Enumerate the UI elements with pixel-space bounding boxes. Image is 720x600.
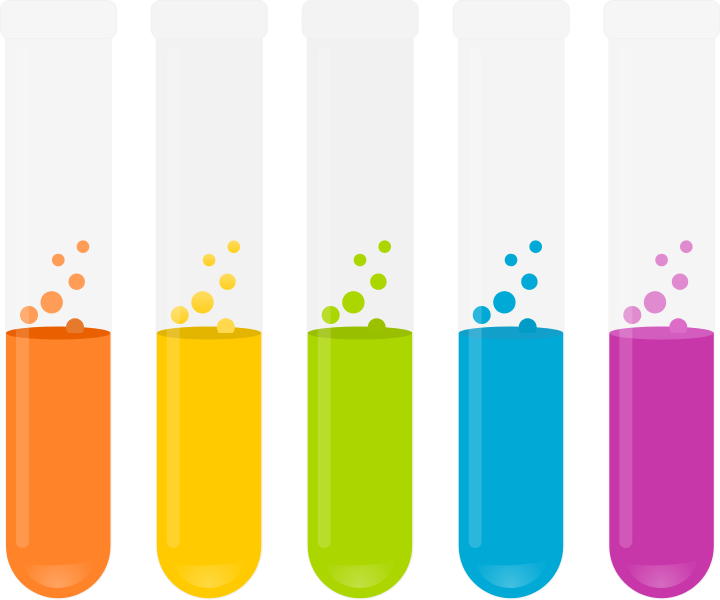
liquid [6,333,110,598]
liquid [609,333,714,598]
tube cap [302,0,418,38]
test tube: blue [453,0,569,600]
glass body [307,30,414,600]
liquid surface [6,326,110,340]
bottom glow [24,561,93,588]
highlight strip [619,47,632,548]
bubbles [473,240,542,324]
tube cap [0,0,116,38]
surfacing bubble [66,318,84,333]
bubbles [322,240,391,324]
surfacing bubble [518,318,537,333]
highlight strip [167,47,180,548]
bottom glow [627,561,696,588]
test tube: yellow [151,0,267,600]
bottom glow [326,561,395,588]
tube cap [151,0,267,38]
glass body [458,30,565,600]
bubbles [171,240,240,324]
tube cap [453,0,569,38]
test tube: magenta [604,0,720,600]
liquid surface [157,326,261,340]
liquid surface [459,326,563,340]
liquid surface [308,326,412,340]
bottom glow [477,561,546,588]
surfacing bubble [216,318,235,333]
liquid [459,333,563,598]
highlight strip [318,47,331,548]
highlight strip [469,47,482,548]
glass body [156,30,263,600]
surfacing bubble [368,318,386,328]
bottom glow [175,561,244,588]
test tube: orange [0,0,116,600]
liquid [157,333,261,598]
bubbles [20,240,89,324]
surfacing bubble [669,318,688,333]
test tube: green [302,0,418,600]
liquid surface [609,326,714,340]
glass body [608,30,715,600]
bubbles [623,240,693,324]
highlight strip [16,47,29,548]
tube cap [604,0,720,38]
liquid [308,333,412,598]
glass body [5,30,112,600]
